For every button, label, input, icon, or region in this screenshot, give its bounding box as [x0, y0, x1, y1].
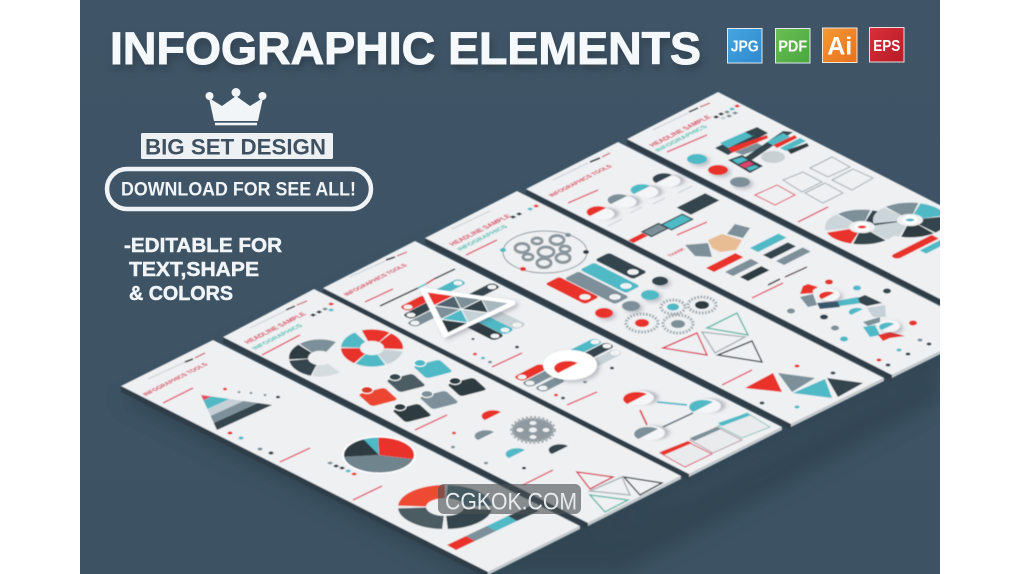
panel 2 legend dots — [451, 432, 526, 469]
panel 4 swatches — [510, 204, 539, 219]
panel 3 red underline — [365, 289, 393, 302]
panel 3 legend dots upper — [472, 338, 519, 363]
panel 6: devices and outlined boxes — [627, 92, 1020, 332]
panel 4 legend dots — [760, 364, 836, 408]
panel 3 back bars left — [513, 364, 566, 392]
panel 6 top line — [653, 113, 688, 130]
text block: editable features: & COLORS — [129, 283, 233, 305]
panel 2 headline: HEADLINE SAMPLE — [242, 311, 309, 345]
icon: crown — [206, 88, 266, 125]
panel 2 segmented ring left — [298, 345, 342, 371]
icon: PDF format badge — [776, 28, 810, 63]
panel 6 red line — [798, 207, 828, 222]
panel 5 headline: INFOGRAPHICS TOOLS — [548, 164, 615, 198]
panel 4: gears, bars, triangles — [425, 191, 884, 430]
icon: Ai format badge: Ai — [827, 32, 852, 60]
panel 5 devices — [628, 193, 719, 243]
panel 2 swatches — [310, 302, 334, 317]
panel 3 headline: INFOGRAPHICS TOOLS — [343, 263, 410, 297]
panel 1 donut chart — [412, 491, 478, 523]
icon: EPS format badge — [870, 28, 904, 62]
panel 3 node semicircles — [617, 388, 727, 443]
icon: JPG format badge — [728, 28, 762, 63]
panel 2: segmented rings, puzzle blocks, gear, triangles — [223, 289, 681, 529]
panel 4 red underline — [466, 240, 497, 255]
panel 2 semicircles — [470, 408, 568, 458]
panel 1 pie chart — [342, 436, 416, 474]
panel 3 back bars right — [562, 338, 623, 367]
panel 3 red line upper — [492, 353, 522, 367]
panel 5 progress line end — [785, 267, 807, 277]
panel 6 segmented ring two — [885, 208, 935, 232]
panel 3 white circle with red semicircle — [543, 350, 597, 380]
panel 3 upper bars — [399, 278, 501, 328]
panel 6 red underline — [667, 135, 707, 152]
watermark: CGKOK.COM — [445, 488, 577, 516]
panel 6 outlined boxes — [755, 157, 873, 205]
panel 5 small labels — [608, 186, 692, 226]
panel 2 top line — [250, 311, 285, 328]
panel 1 red line upper — [280, 448, 310, 462]
panel 4 red bar — [545, 277, 599, 304]
panel 5 thank label: THANK — [666, 247, 688, 258]
text block: editable features: -EDITABLE FOR — [124, 235, 283, 257]
panel 4 gray bar — [564, 271, 629, 304]
panel 5 label bars — [706, 234, 811, 281]
panel 1 lower legend dots — [228, 432, 274, 454]
panel 1 swatches — [327, 461, 357, 476]
panel 3 top line — [350, 261, 385, 277]
panel 1: pyramid, pie, donut — [121, 340, 580, 574]
text block: editable features — [124, 235, 283, 305]
panel stack — [121, 92, 1020, 574]
panel 4 gears row — [626, 297, 716, 333]
icon: handshake — [685, 224, 750, 257]
panel 5 semicircles — [582, 171, 685, 222]
panel 1 bottom segment bar — [447, 506, 539, 550]
button: download for see all: DOWNLOAD FOR SEE ALL! — [121, 180, 356, 200]
panel 6 ring two centre — [904, 217, 916, 223]
panel 1 red underline — [163, 388, 193, 403]
panel 6 colour swatches — [713, 104, 740, 120]
panel 1 headline: INFOGRAPHICS TOOLS — [142, 362, 211, 397]
panel 5 progress line — [768, 279, 780, 285]
icon: JPG format badge: JPG — [731, 38, 759, 56]
panel 1 red line lower — [353, 486, 382, 500]
panel 2 big gear — [512, 418, 554, 442]
panel 4 top line — [452, 211, 490, 229]
panel 2 red line lower — [523, 470, 553, 485]
panel 5: semicircles, devices, handshake, cycle arrows — [526, 142, 985, 381]
panel 4 outlined triangles — [663, 313, 762, 362]
panel 3 multicolour line — [380, 269, 455, 306]
badge: big set design: BIG SET DESIGN — [145, 134, 326, 160]
panel 6 ring one centre — [856, 224, 868, 230]
panel 4 teal bar — [580, 263, 640, 293]
icon: Ai format badge — [822, 28, 857, 62]
panel 4 orbit knobs — [500, 233, 589, 271]
panel 6 red bar — [890, 235, 939, 260]
panel 5 red underline — [568, 190, 598, 203]
button: download for see all — [107, 169, 371, 209]
title: INFOGRAPHIC ELEMENTS — [110, 23, 701, 74]
panel 2 outlined triangles — [577, 472, 662, 512]
panel 5 top line — [553, 163, 588, 180]
panel 2 puzzle blocks — [358, 359, 487, 423]
panel 3 tables — [660, 413, 770, 467]
panel 5 red line — [677, 222, 707, 235]
panel 3 lower bars — [465, 309, 527, 341]
panel 1 upper legend dots — [223, 388, 280, 398]
panel 6 segmented ring one — [837, 215, 887, 239]
panel 2 segmented ring right — [350, 335, 394, 361]
panel 2 red line upper — [415, 415, 447, 430]
panel 3 triangle mosaic — [423, 290, 513, 335]
panel 3 node connectors — [640, 402, 693, 427]
panel 5 cycle arrows — [800, 284, 905, 341]
panel 1 top line — [148, 362, 185, 379]
icon: PDF format badge: PDF — [778, 38, 807, 56]
panel 4 sub headline: INFOGRAPHICS — [456, 224, 510, 252]
panel 4 headline: HEADLINE SAMPLE — [447, 213, 514, 247]
panel 2 sub headline: INFOGRAPHICS — [251, 323, 305, 351]
panel 6 teal bar — [920, 237, 953, 254]
panel 6 headline: HEADLINE SAMPLE — [647, 114, 714, 148]
panel 2 red underline — [262, 335, 300, 355]
panel 3 red line lower — [567, 392, 597, 405]
panel 4 dark bar — [595, 253, 647, 279]
panel 6 sub headline: INFOGRAPHICS — [654, 124, 710, 153]
panel 5 legend dots — [787, 280, 932, 366]
panel 6 responsive devices — [715, 127, 809, 173]
panel 6 circles — [687, 154, 750, 187]
panel 4 circles — [595, 276, 668, 318]
panel 4 red line — [722, 370, 752, 385]
panel 3: triangle mosaic, bars, tables — [323, 241, 782, 480]
panel 1 pyramid — [201, 395, 272, 430]
panel shadows — [121, 150, 985, 574]
panel 3 legend dots lower — [554, 367, 614, 399]
text block: editable features: TEXT,SHAPE — [129, 259, 259, 281]
panel 4 gear orbit — [503, 231, 587, 273]
panel 4 small gears — [515, 236, 570, 268]
icon: EPS format badge: EPS — [873, 38, 900, 55]
panel 5 red line lower — [752, 283, 783, 298]
panel 4 solid triangles — [745, 373, 863, 398]
